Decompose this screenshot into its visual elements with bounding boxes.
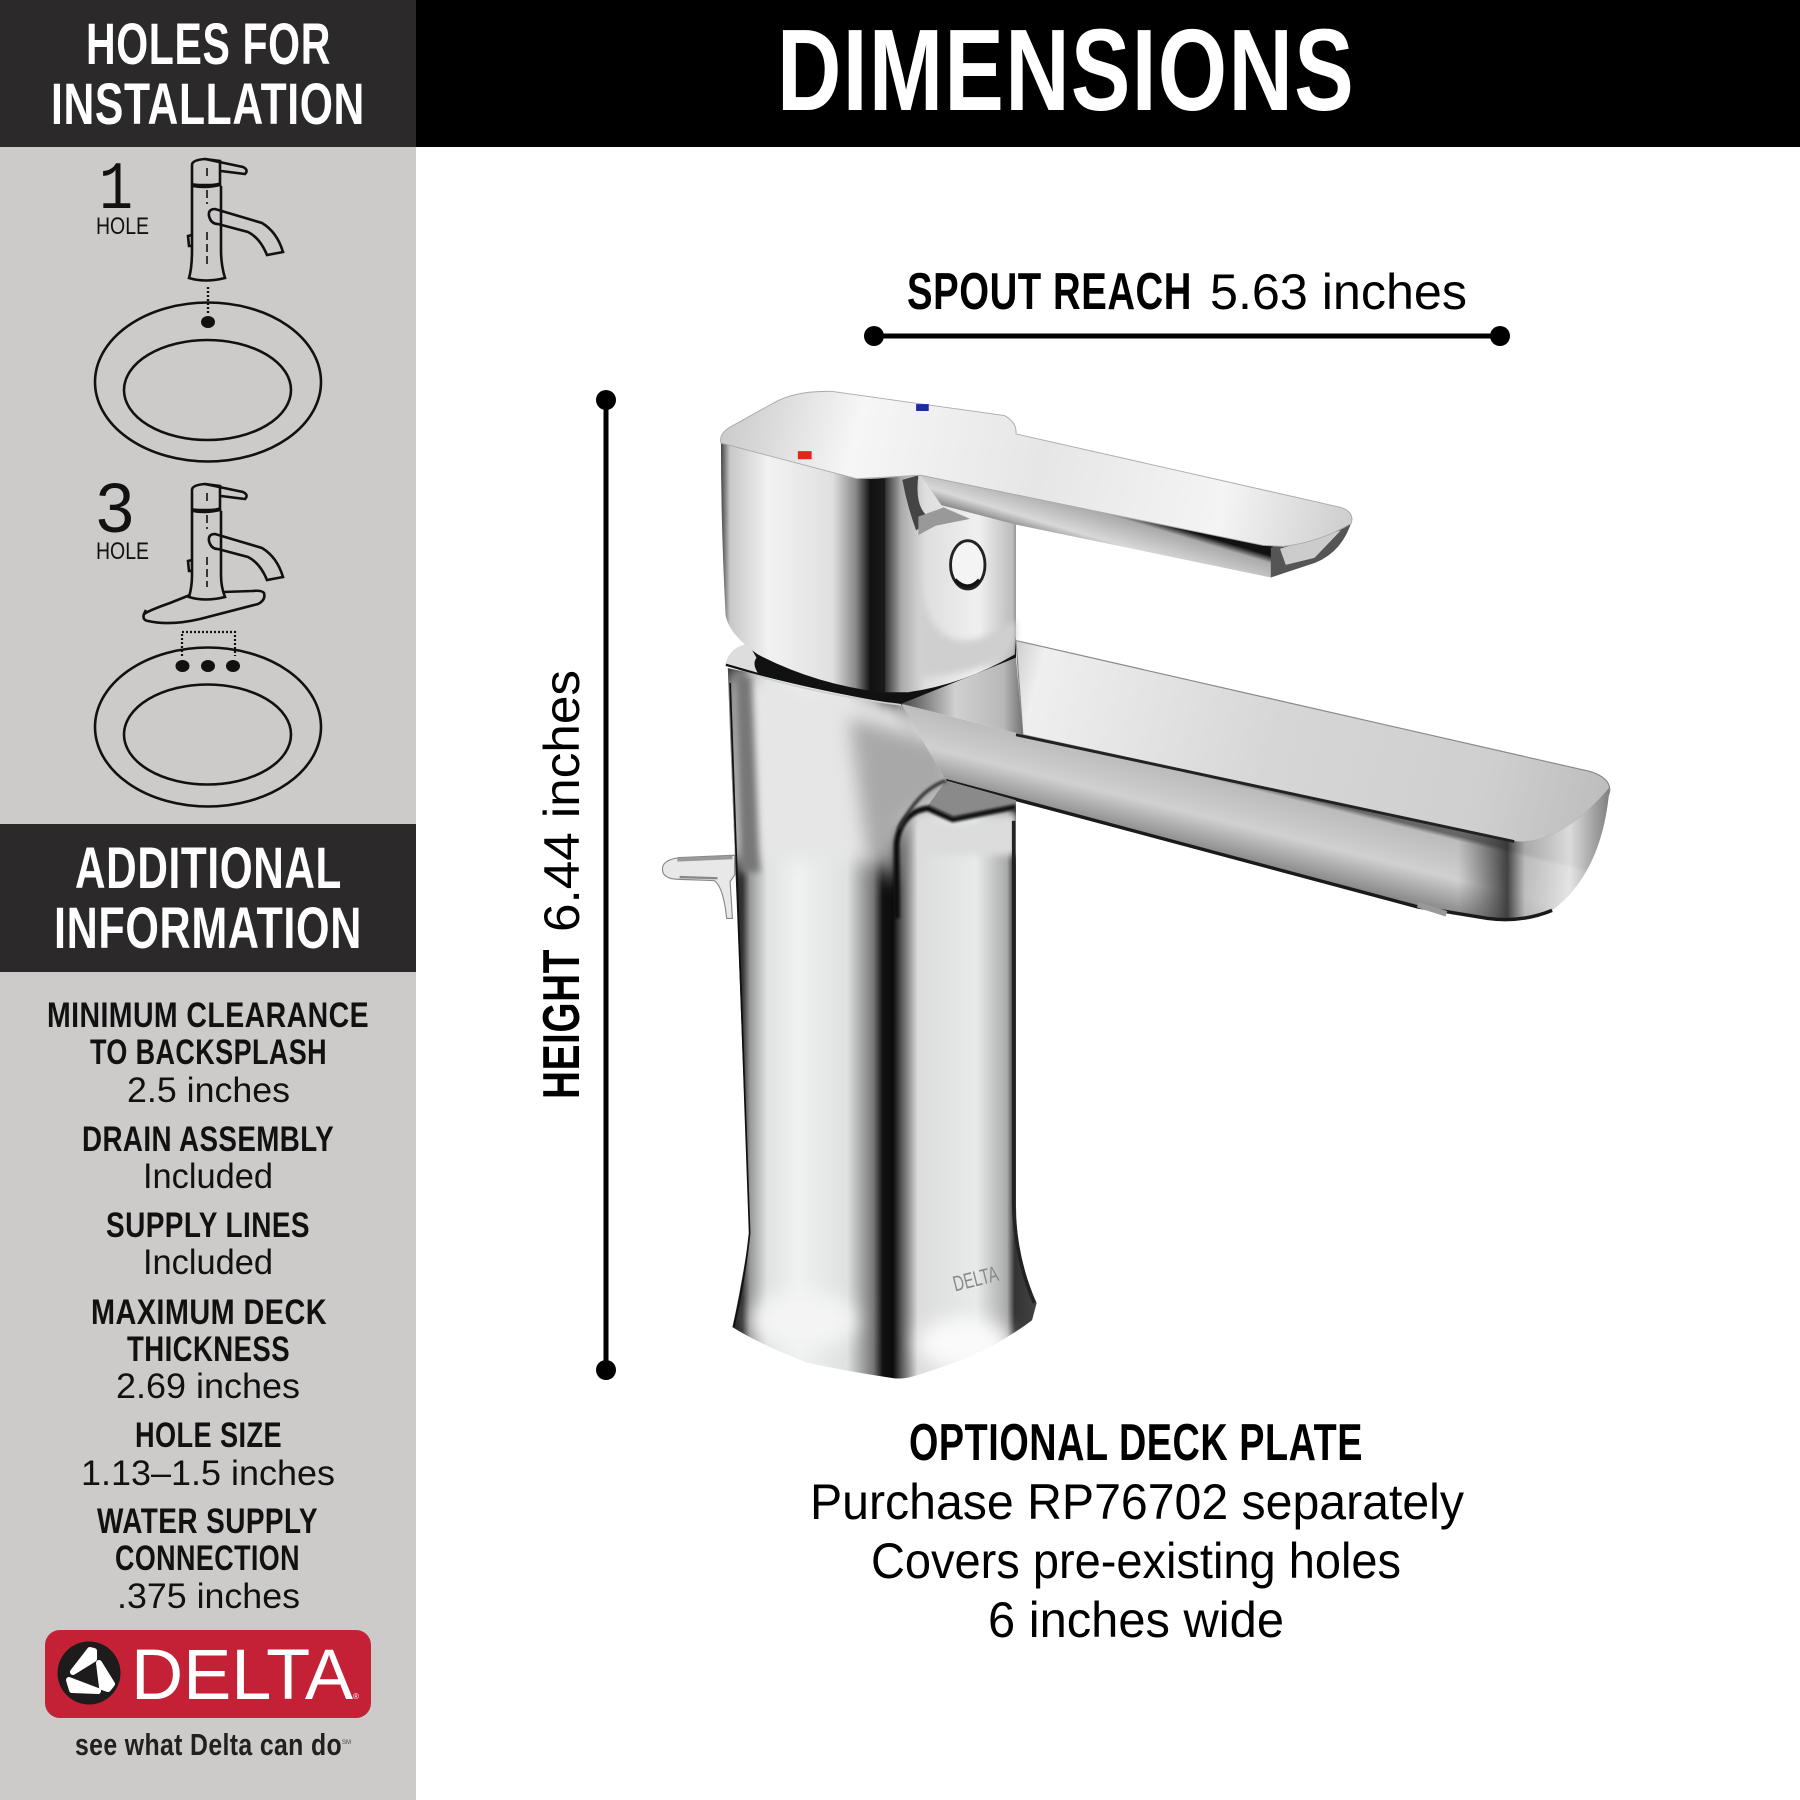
- spec: minimum clearance: TO BACKSPLASH: [90, 1033, 327, 1072]
- spec: minimum clearance: MINIMUM CLEARANCE: [47, 996, 369, 1035]
- inner arch under spout: [897, 807, 1016, 918]
- icon: 3 hole faucet and sink: [95, 469, 321, 806]
- icon: one hole faucet: [188, 159, 283, 280]
- base flare light: [752, 1293, 855, 1348]
- dimension: height: [533, 390, 616, 1380]
- label: 1 hole: [96, 152, 149, 240]
- lever front face: [918, 475, 1352, 577]
- drain pop-up rod: [662, 855, 735, 918]
- spec: water supply connection: .375 inches: [117, 1577, 300, 1616]
- underside shadow of spout: [928, 781, 1016, 817]
- icon: one hole sink: [95, 287, 321, 462]
- spec: water supply connection: [97, 1502, 318, 1616]
- handle top face: [721, 391, 1352, 546]
- logo: Delta: ®: [353, 1692, 359, 1701]
- spec: drain assembly: DRAIN ASSEMBLY: [82, 1120, 334, 1159]
- spec: hole size: 1.13–1.5 inches: [81, 1454, 335, 1493]
- text block: optional deck plate: OPTIONAL DECK PLATE: [909, 1414, 1363, 1472]
- tagline: SM: [342, 1740, 351, 1746]
- spec: maximum deck thickness: 2.69 inches: [116, 1367, 300, 1406]
- spec: hole size: HOLE SIZE: [135, 1416, 282, 1455]
- dimension: height: 6.44 inches: [534, 670, 590, 932]
- dimension: spout reach: SPOUT REACH: [907, 263, 1192, 321]
- spec: minimum clearance: 2.5 inches: [127, 1071, 290, 1110]
- spout: [901, 641, 1610, 920]
- label: 3 hole: 3: [96, 469, 134, 547]
- spec: supply lines: SUPPLY LINES: [106, 1206, 310, 1245]
- hot marker: [798, 451, 812, 459]
- handle block front face: [721, 440, 885, 692]
- dimension: spout reach: 5.63 inches: [1210, 264, 1467, 320]
- text block: optional deck plate: Purchase RP76702 separately: [810, 1474, 1464, 1530]
- faucet body: [728, 668, 1037, 1379]
- heading: additional information: INFORMATION: [54, 896, 362, 961]
- spec: drain assembly: Included: [143, 1157, 273, 1196]
- title: [416, 0, 1800, 147]
- icon: three hole sink: [95, 632, 321, 806]
- text block: additional information list: [47, 996, 369, 1616]
- spec: drain assembly: [82, 1120, 334, 1196]
- spec: water supply connection: WATER SUPPLY: [97, 1502, 318, 1541]
- spec: water supply connection: CONNECTION: [115, 1539, 300, 1578]
- text block: optional deck plate: 6 inches wide: [988, 1592, 1284, 1648]
- spec: hole size: [81, 1416, 335, 1493]
- heading: holes for installation: [0, 0, 416, 147]
- engraved brand: DELTA: [950, 1261, 1001, 1296]
- collar under handle: [726, 637, 1023, 735]
- spec: maximum deck thickness: MAXIMUM DECK: [91, 1293, 327, 1332]
- upper junction wash: [730, 672, 953, 861]
- label: 3 hole: HOLE: [96, 538, 149, 565]
- logo: Delta: [45, 1630, 371, 1718]
- heading: additional information: ADDITIONAL: [75, 836, 342, 901]
- spec: supply lines: Included: [143, 1243, 273, 1282]
- tagline: see what Delta can do: [75, 1727, 342, 1762]
- spec: minimum clearance: [47, 996, 369, 1110]
- lever release hole: [951, 541, 985, 589]
- icon: delta triangle mark: [58, 1642, 120, 1704]
- cold marker: [916, 404, 929, 411]
- icon: 1 hole faucet and sink: [95, 152, 321, 462]
- label: 1 hole: 1: [99, 152, 133, 229]
- title: DIMENSIONS: [777, 5, 1355, 135]
- handle lever: [918, 475, 1352, 577]
- icon: three hole faucet with plate: [144, 484, 283, 623]
- spec: supply lines: [106, 1206, 310, 1282]
- heading: holes for installation: HOLES FOR: [86, 12, 331, 77]
- label: 3 hole: [96, 469, 149, 565]
- text block: optional deck plate: Covers pre-existing holes: [871, 1533, 1401, 1589]
- dimension: spout reach: [864, 263, 1510, 346]
- dimension: height: HEIGHT: [533, 949, 591, 1099]
- handle block side face: [872, 475, 1016, 692]
- heading: additional information: [0, 824, 416, 972]
- spec: maximum deck thickness: [91, 1293, 327, 1406]
- faucet illustration: [662, 391, 1610, 1379]
- label: 1 hole: HOLE: [96, 213, 149, 240]
- panel: left sidebar: [0, 0, 416, 1800]
- heading: holes for installation: INSTALLATION: [51, 72, 365, 137]
- spec: maximum deck thickness: THICKNESS: [127, 1330, 290, 1369]
- text block: optional deck plate: [810, 1414, 1464, 1648]
- logo: Delta: DELTA: [131, 1636, 354, 1715]
